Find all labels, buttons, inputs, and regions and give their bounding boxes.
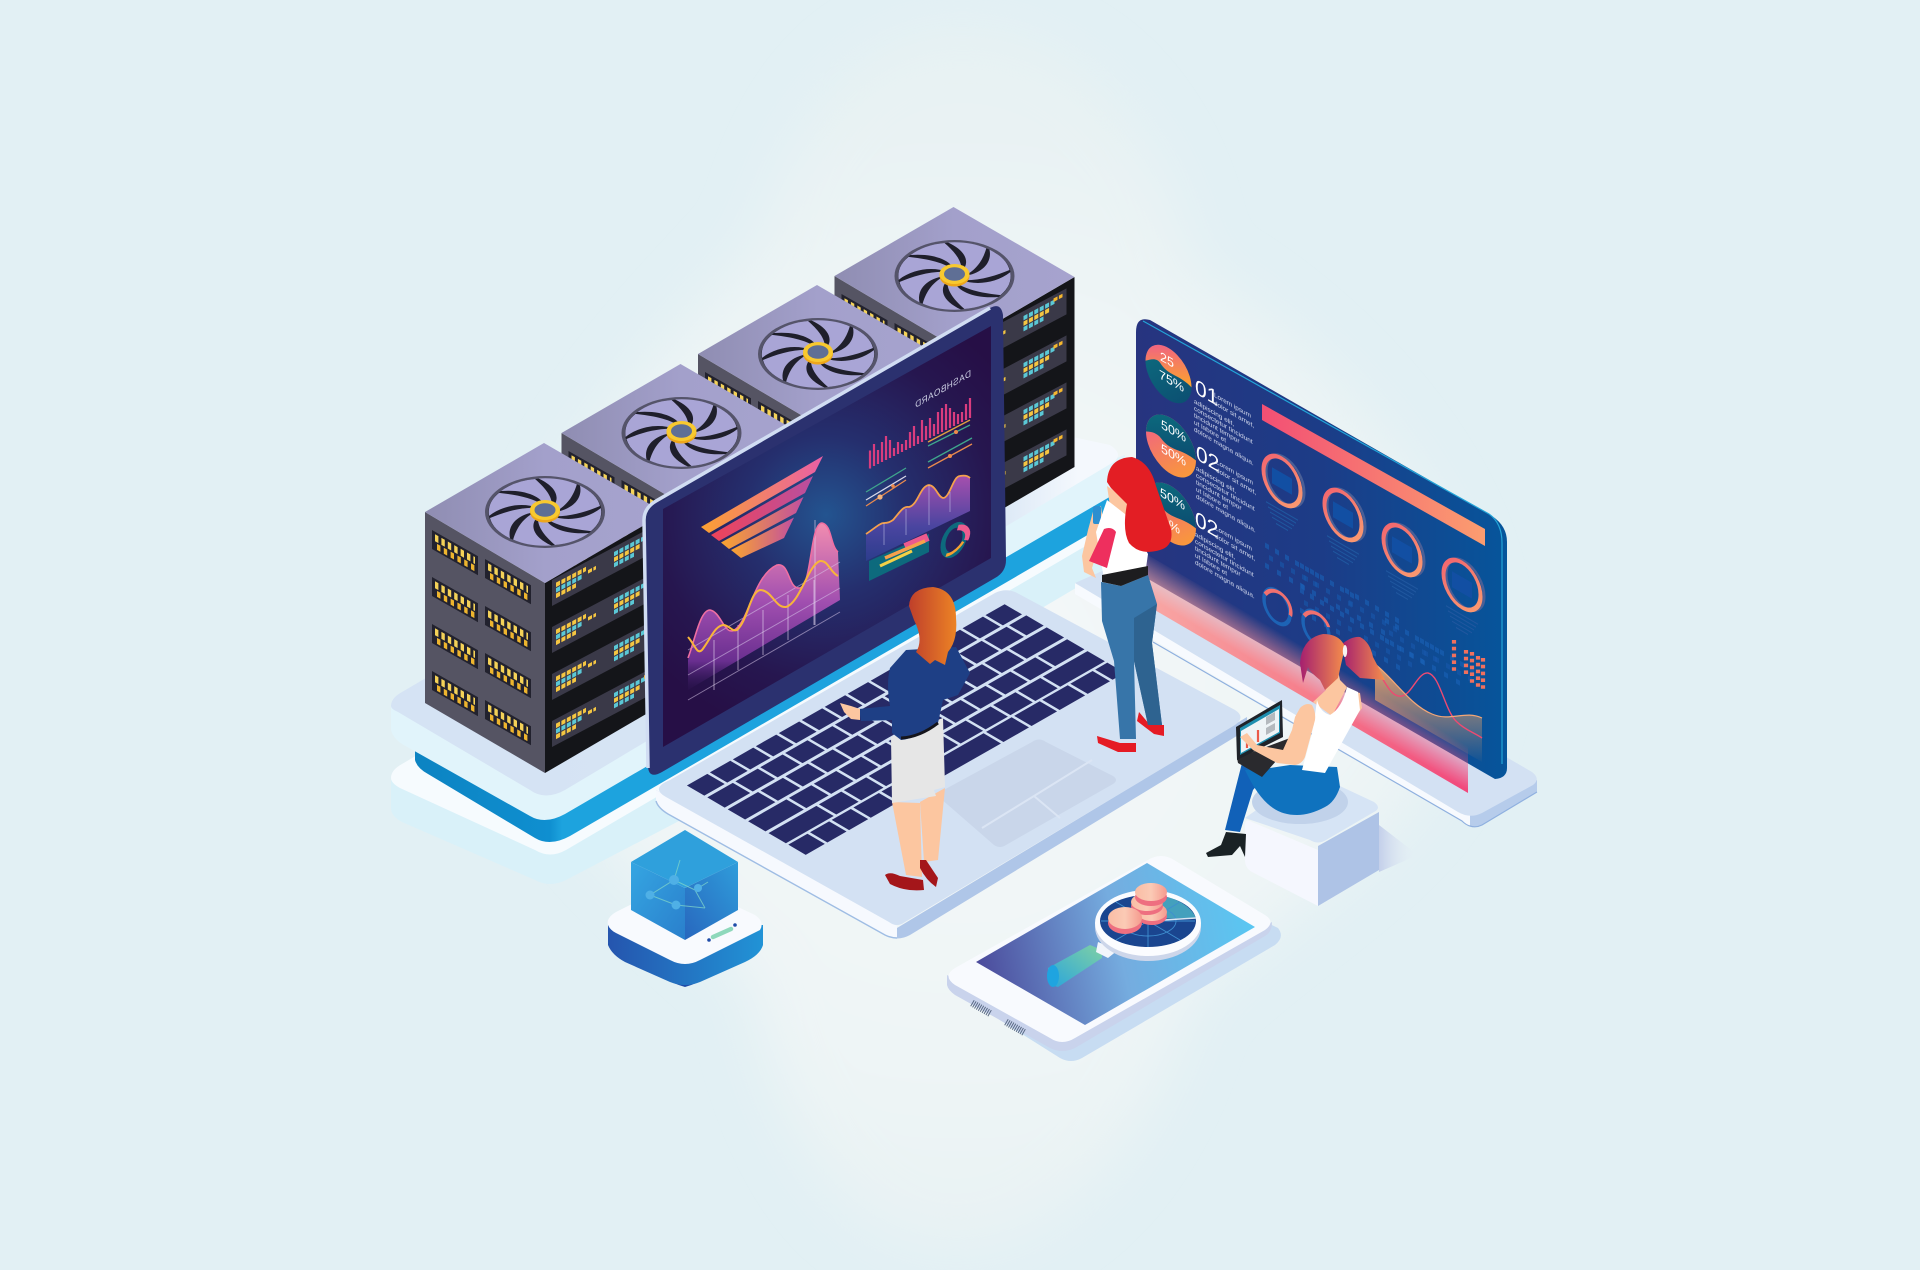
small ring gauges: [1258, 574, 1335, 661]
list item 02: [1196, 440, 1256, 535]
seat cube: [1245, 772, 1418, 906]
mini laptop: [1236, 700, 1292, 777]
shoes: [1097, 712, 1164, 752]
upper slab: [391, 400, 1125, 820]
list item 01: 01: [1195, 374, 1218, 411]
background blob: [519, 30, 1472, 1250]
list item 01: [1194, 374, 1254, 468]
list item 02: ut labore et: [1196, 486, 1228, 511]
display base plate: [1075, 550, 1537, 827]
shoes: [885, 860, 938, 890]
list item 02 second: dolore magna aliqua.: [1195, 559, 1255, 601]
ring gauges: [1264, 447, 1484, 640]
list item 02 second: dolor sit amet,: [1215, 533, 1255, 563]
list item 02: dolor sit amet,: [1216, 467, 1256, 497]
boot: [1206, 832, 1246, 857]
hair: [1107, 457, 1172, 552]
laptop: [643, 306, 1247, 939]
server rack 1: [425, 443, 665, 773]
device base: [608, 880, 763, 987]
coin stack: [1108, 883, 1167, 934]
port grilles: [972, 1003, 1025, 1033]
neck and face: [1308, 660, 1347, 716]
ponytail: [1342, 637, 1385, 680]
status pill: [707, 923, 737, 942]
pie chart 25 / 75: 75%: [1159, 367, 1184, 395]
mirrored dashboard title: DASHBOARD: [915, 368, 971, 411]
tablet: [947, 856, 1281, 1061]
bar chart on screen: [870, 398, 970, 468]
pink glow strip: [1136, 548, 1468, 793]
laptop deck: [659, 590, 1240, 925]
crystal cube device: [608, 830, 763, 987]
pie chart 25 / 75: 25: [1160, 349, 1174, 371]
laptop screen frame: [643, 306, 1006, 775]
lower slab: [391, 470, 1130, 884]
keyboard: [696, 609, 1116, 850]
pie chart 50 / 50 second: 50%: [1160, 485, 1185, 513]
crystal cube: [631, 830, 738, 940]
large dashboard display: [1136, 319, 1507, 793]
list item 02 second: 02: [1195, 506, 1218, 543]
sliders: [866, 420, 972, 506]
server rack 2: [562, 364, 802, 694]
white top: [1302, 687, 1360, 773]
display rim highlight: [1143, 321, 1502, 764]
list item 02 second: adipiscing elit,: [1195, 531, 1235, 561]
seated woman: [1206, 634, 1385, 857]
jeans: [1101, 575, 1162, 739]
wave chart: [1373, 664, 1482, 762]
scatter dots: [1265, 545, 1480, 695]
pie chart 50 / 50 second: [1146, 472, 1196, 556]
server rack 4: [834, 207, 1074, 537]
pie chart 50 / 50: [1146, 404, 1196, 488]
list item 02: Lorem ipsum: [1216, 459, 1253, 487]
list item 01: adipiscing elit,: [1194, 398, 1234, 428]
list item 02 second: consectetur tincidunt: [1195, 538, 1254, 579]
funnel chart: [701, 456, 823, 558]
arm: [1240, 704, 1315, 765]
list item 02 second: tincidunt tempor: [1195, 545, 1241, 579]
face and shirt: [1096, 486, 1148, 579]
pie chart 50 / 50: 50%: [1161, 441, 1186, 469]
trackpad: [938, 740, 1116, 847]
stacked bars: [869, 534, 929, 581]
list item 01: tincidunt tempor: [1194, 412, 1240, 446]
jeans: [1225, 763, 1340, 832]
donut chart: [936, 514, 972, 566]
list item 02: consectetur tincidunt: [1196, 472, 1255, 513]
laptop base side: [656, 717, 1247, 938]
blue band: [415, 485, 1110, 842]
list item 01: dolor sit amet,: [1214, 400, 1254, 430]
top gradient bar: [1262, 404, 1485, 546]
hair: [1300, 634, 1345, 690]
tablet body: [947, 922, 1272, 1051]
display panel: [1136, 319, 1507, 779]
list item 02: 02: [1196, 440, 1219, 477]
arm and phone: [1082, 506, 1104, 578]
server platform: [391, 400, 1130, 884]
list item 01: dolore magna aliqua.: [1194, 426, 1254, 468]
list item 02 second: [1195, 506, 1255, 601]
small area chart: [866, 476, 970, 561]
jacket and arm: [840, 647, 970, 740]
pie chart 50 / 50 second: 50%: [1155, 509, 1180, 537]
illustration canvas: [391, 176, 1538, 1186]
area chart: [688, 520, 840, 700]
list item 02: adipiscing elit,: [1196, 465, 1236, 495]
woman with red hair: [1082, 457, 1172, 752]
pie chart 50 / 50: 50%: [1161, 417, 1186, 445]
pie chart 25 / 75: [1146, 335, 1192, 413]
list item 02 second: Lorem ipsum: [1215, 525, 1252, 553]
tablet screen: [976, 863, 1255, 1025]
pink dot grid: [1454, 640, 1483, 690]
hair tie: [1343, 645, 1347, 657]
tablet shadow: [965, 870, 1281, 1061]
list item 01: consectetur tincidunt: [1194, 405, 1253, 446]
hair: [909, 587, 956, 665]
server rack 3: [698, 285, 938, 615]
list item 02: tincidunt tempor: [1196, 479, 1242, 513]
list item 02 second: ut labore et: [1195, 552, 1227, 577]
sleeve: [1089, 528, 1116, 568]
list item 02: dolore magna aliqua.: [1196, 493, 1256, 535]
skirt: [891, 718, 945, 803]
belt: [1102, 566, 1148, 586]
magnifier: [1047, 890, 1201, 987]
list item 01: ut labore et: [1194, 419, 1226, 444]
legs: [892, 788, 945, 877]
woman with orange hair: [840, 587, 970, 890]
list item 01: Lorem ipsum: [1214, 392, 1251, 420]
right shoulder: [1350, 692, 1362, 722]
